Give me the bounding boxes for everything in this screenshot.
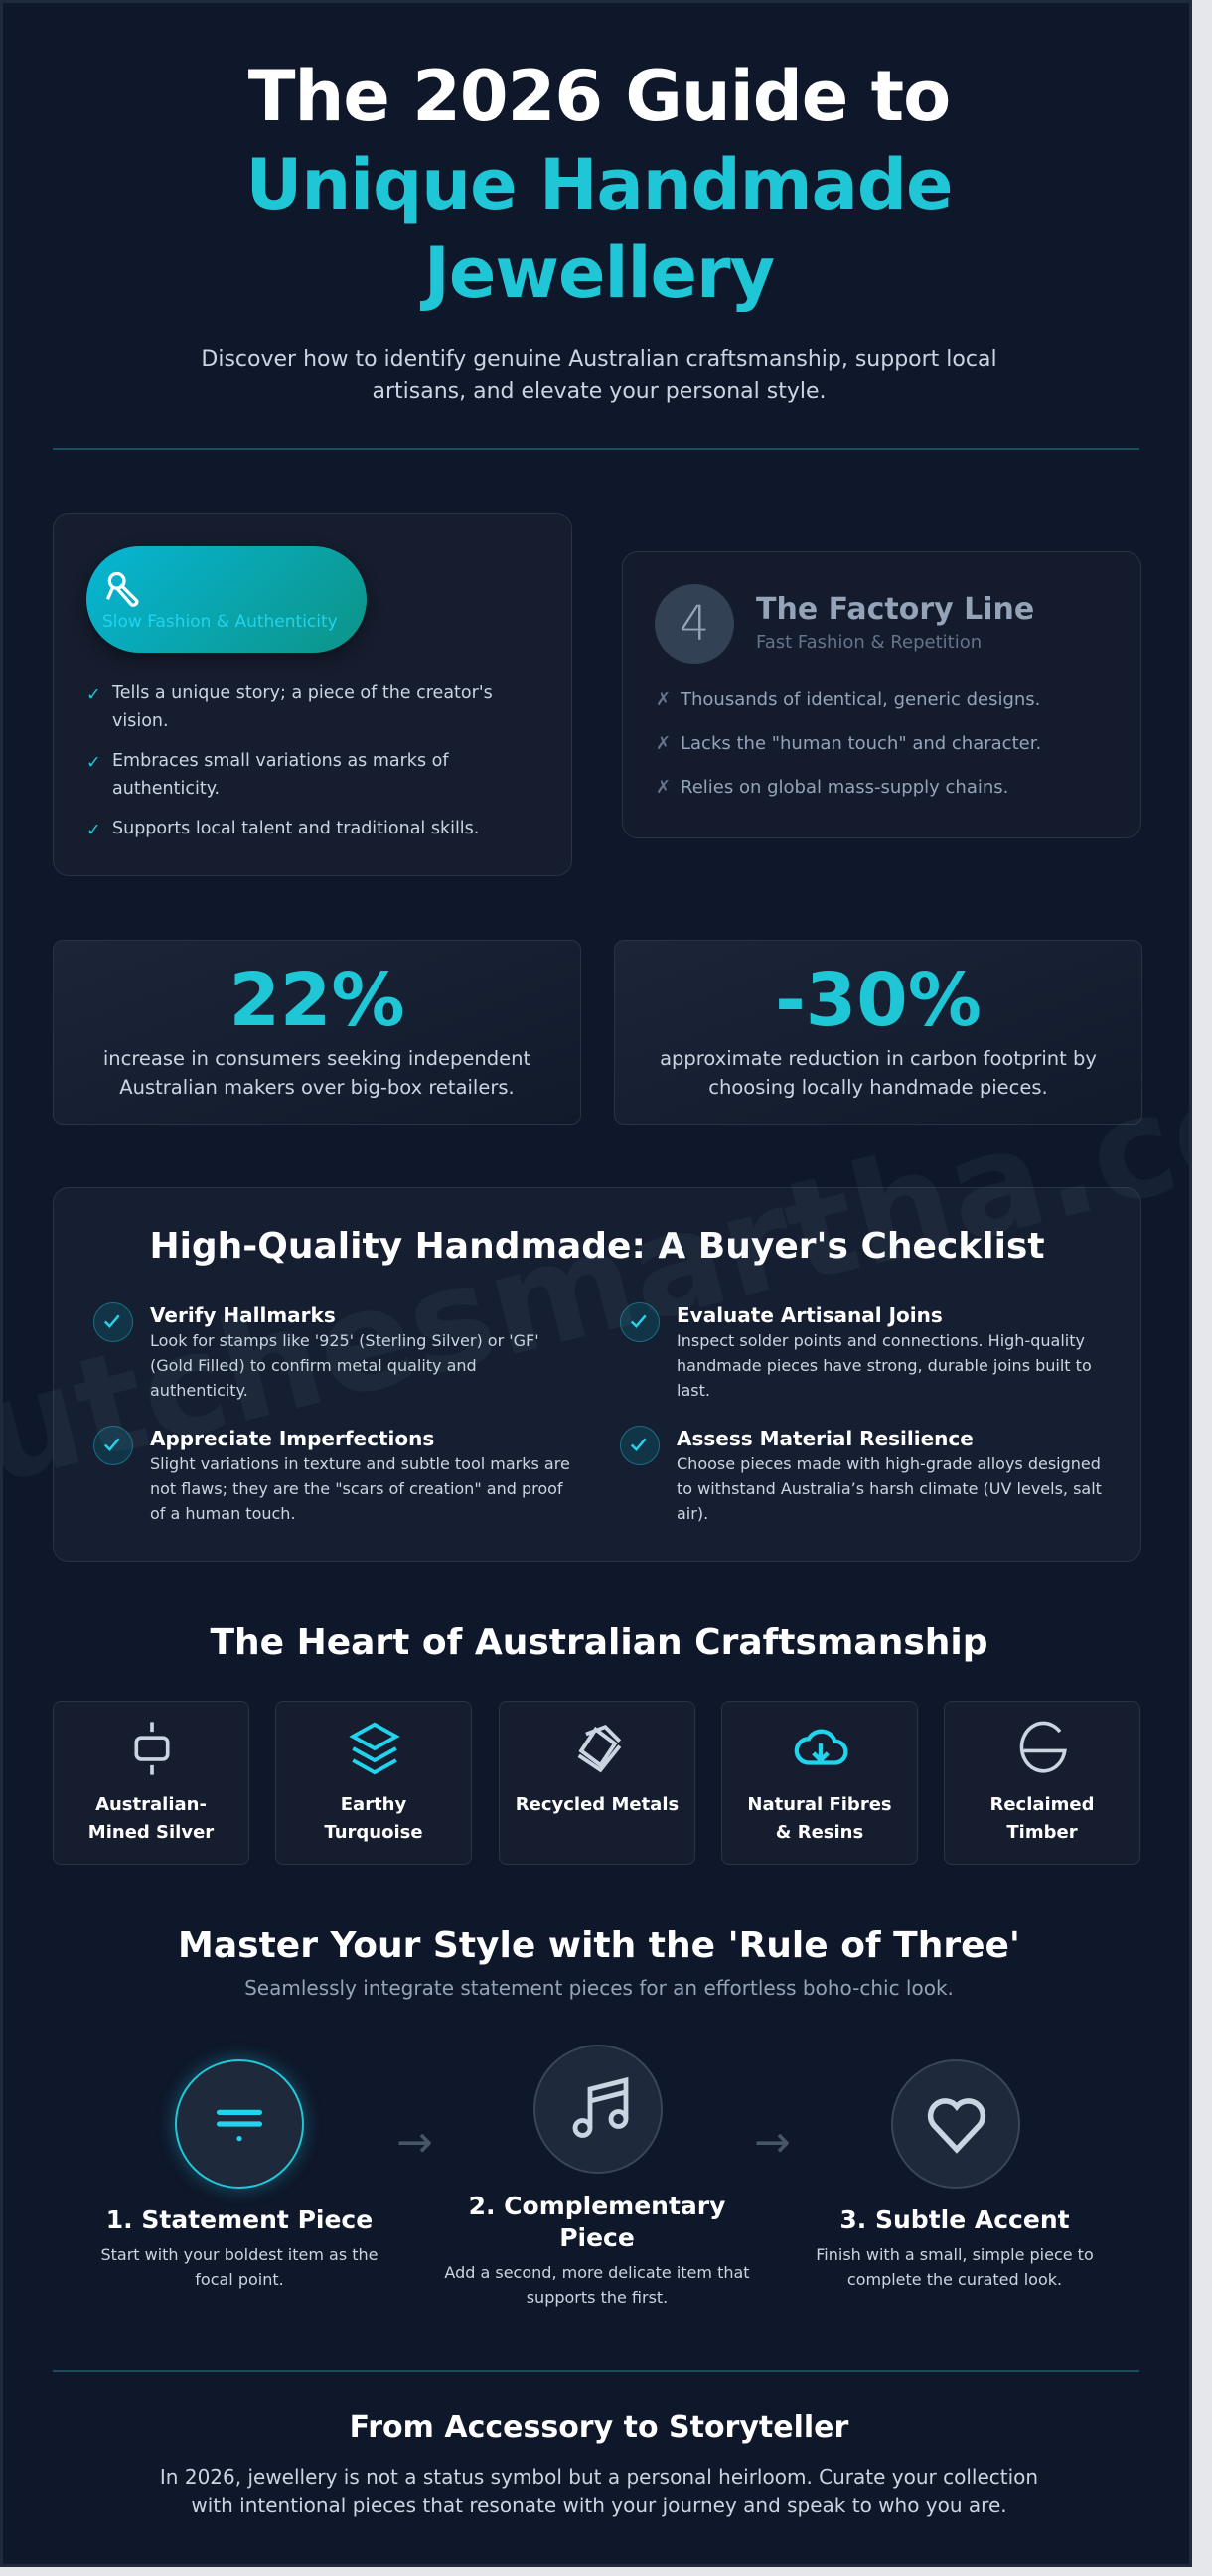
step 2 icon (533, 2045, 663, 2174)
heading: craftsmanship: The Heart of Australian Craftsmanship (210, 1622, 988, 1663)
panel: factory line: ✗ (656, 733, 671, 754)
step 1 text: 1. Statement Piece (106, 2205, 373, 2234)
subtitle: artisans, and elevate your personal style. (372, 379, 827, 404)
checklist heading: High-Quality Handmade: A Buyer's Checklist (149, 1226, 1045, 1267)
list: cons: Thousands of identical, generic designs. (681, 689, 1040, 710)
stat: -30%: -30% (775, 958, 982, 1043)
heading: rule of three: Master Your Style with the 'Rule of Three' (178, 1925, 1020, 1966)
step 1 text: focal point. (195, 2270, 284, 2289)
title: Unique Handmade (246, 144, 952, 226)
material: metals (499, 1701, 695, 1865)
item: joins (620, 1302, 1092, 1400)
closing text (160, 2465, 1038, 2517)
material: metals: Recycled Metals (516, 1794, 679, 1815)
panel: factory line: ✗ (656, 689, 671, 710)
step 3 text: 3. Subtle Accent (839, 2205, 1070, 2234)
material: timber (944, 1701, 1140, 1865)
panel: factory line: Relies on global mass-supply chains. (681, 777, 1008, 798)
panel: slow fashion: ✓ (86, 753, 101, 773)
icon: 4 (655, 584, 734, 664)
panel: slow fashion: Embraces small variations as marks of authenticity. (112, 751, 449, 799)
item: imperfections: Slight variations in texture and subtle tool marks are not flaws; they are the "scars of creation" and proof of a human touch. (150, 1454, 570, 1523)
item: resilience: Assess Material Resilience (677, 1427, 974, 1450)
item: imperfections (93, 1426, 570, 1523)
item: imperfections: Appreciate Imperfections (150, 1427, 434, 1450)
closing text: with intentional pieces that resonate with your journey and speak to who you are. (191, 2494, 1007, 2517)
stat: 22%: increase in consumers seeking independent Australian makers over big-box retailers. (103, 1047, 530, 1099)
panel: checklist (53, 1187, 1141, 1562)
heading: storyteller: From Accessory to Storyteller (350, 2410, 848, 2445)
step 3 text: complete the curated look. (847, 2270, 1062, 2289)
icon: 4: 4 (680, 596, 709, 652)
panel: slow fashion (53, 513, 572, 876)
material: timber: Reclaimed (989, 1794, 1095, 1815)
stat: 22%: 22% (228, 958, 405, 1043)
stat: -30%: approximate reduction in carbon footprint by choosing locally handmade pieces. (660, 1047, 1097, 1099)
stat: 22% (53, 940, 581, 1125)
material: timber: Timber (1006, 1822, 1078, 1843)
stat: -30% (614, 940, 1142, 1125)
icon: tools (106, 572, 139, 607)
material: silver: Australian- (95, 1794, 207, 1815)
step 1 text: Start with your boldest item as the (100, 2245, 379, 2264)
title (246, 56, 952, 314)
closing text: In 2026, jewellery is not a status symbol but a personal heirloom. Curate your collection (160, 2465, 1038, 2489)
item: resilience (620, 1426, 1102, 1523)
panel: factory line: Fast Fashion & Repetition (756, 632, 982, 653)
step 3 text (816, 2205, 1094, 2289)
arrow 2: → (754, 2117, 791, 2168)
list: pros: Tells a unique story; a piece of the creator's vision. (112, 683, 493, 731)
step 2 text: supports the first. (527, 2288, 668, 2307)
title: The 2026 Guide to (248, 56, 950, 137)
step 2 text: Piece (559, 2223, 635, 2252)
panel: factory line (622, 551, 1141, 838)
material: turquoise (275, 1701, 472, 1865)
step 3 icon (891, 2059, 1020, 2189)
item: hallmarks (93, 1302, 539, 1400)
panel: slow fashion: ✓ (86, 685, 101, 705)
pill badge: Slow Fashion & Authenticity (102, 612, 338, 632)
pill badge (86, 546, 367, 653)
step 2 text: Add a second, more delicate item that (444, 2263, 750, 2282)
step 3 text: Finish with a small, simple piece to (816, 2245, 1094, 2264)
item: resilience: Choose pieces made with high-grade alloys designed to withstand Australia’s harsh climate (UV levels, salt air). (677, 1454, 1102, 1523)
material: turquoise: Earthy (341, 1794, 406, 1815)
step 1 icon (175, 2059, 304, 2189)
subtitle (201, 347, 997, 404)
panel: factory line: ✗ (656, 777, 671, 798)
material: silver: Mined Silver (88, 1822, 214, 1843)
subheading: Seamlessly integrate statement pieces for an effortless boho-chic look. (244, 1976, 954, 2000)
material: fibres: Natural Fibres (747, 1794, 892, 1815)
step 1 text (100, 2205, 379, 2289)
panel: slow fashion: ✓ (86, 821, 101, 840)
step 2 text: 2. Complementary (469, 2192, 725, 2220)
panel: factory line: The Factory Line (756, 592, 1034, 627)
arrow 1: → (396, 2117, 433, 2168)
item: joins: Inspect solder points and connections. High-quality handmade pieces have strong, durable joins built to last. (677, 1331, 1092, 1400)
panel: slow fashion: Supports local talent and traditional skills. (112, 819, 479, 838)
step 2 text (444, 2192, 750, 2307)
title: Jewellery (424, 232, 774, 314)
subtitle: Discover how to identify genuine Australian craftsmanship, support local (201, 347, 997, 372)
material: turquoise: Turquoise (324, 1822, 423, 1843)
item: joins: Evaluate Artisanal Joins (677, 1303, 943, 1327)
item: hallmarks: Look for stamps like '925' (Sterling Silver) or 'GF' (Gold Filled) to confirm metal quality and authenticity. (150, 1331, 539, 1400)
item: hallmarks: Verify Hallmarks (150, 1303, 336, 1327)
material: silver (53, 1701, 249, 1865)
material: fibres (721, 1701, 918, 1865)
panel: factory line: Lacks the "human touch" and character. (681, 733, 1041, 754)
material: fibres: & Resins (776, 1822, 863, 1843)
